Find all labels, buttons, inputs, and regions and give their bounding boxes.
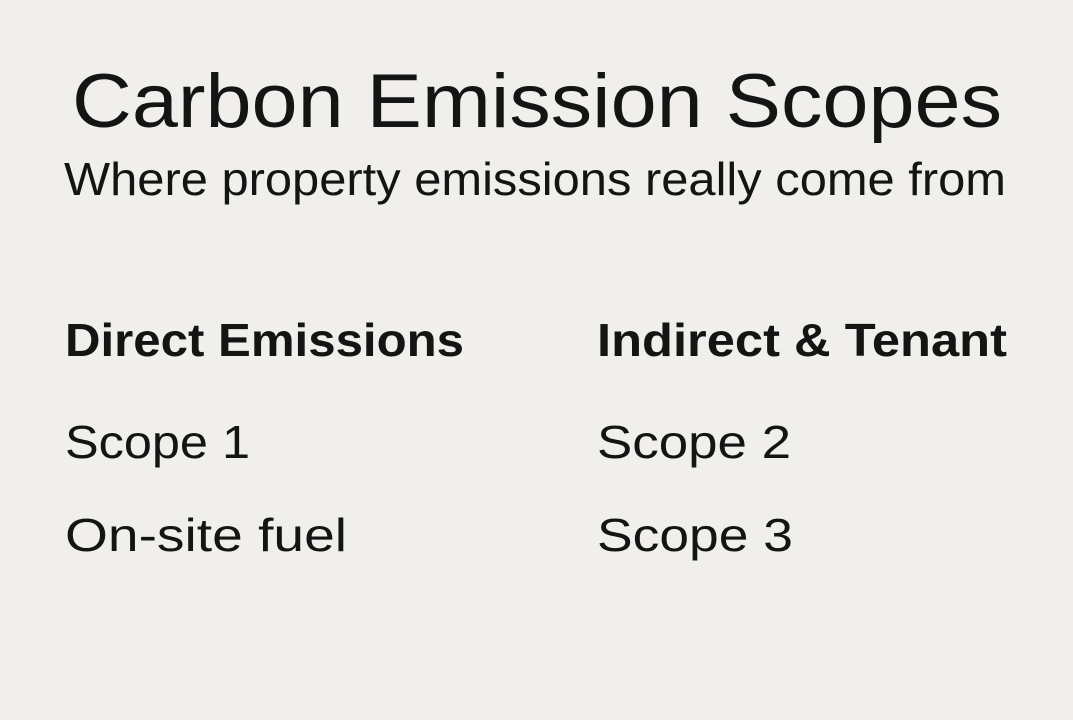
item: scope 3: Scope 3	[597, 509, 793, 561]
column: direct emissions	[65, 314, 464, 561]
heading: direct emissions: Direct Emissions	[65, 314, 464, 366]
item: scope 1: Scope 1	[65, 416, 250, 468]
subtitle: Where property emissions really come from	[64, 153, 1006, 205]
heading: indirect & tenant: Indirect & Tenant	[597, 314, 1007, 366]
title: Carbon Emission Scopes	[72, 59, 1002, 144]
column: indirect & tenant	[597, 314, 1007, 561]
item: scope 2: Scope 2	[597, 416, 791, 468]
item: on-site fuel: On-site fuel	[65, 509, 347, 561]
